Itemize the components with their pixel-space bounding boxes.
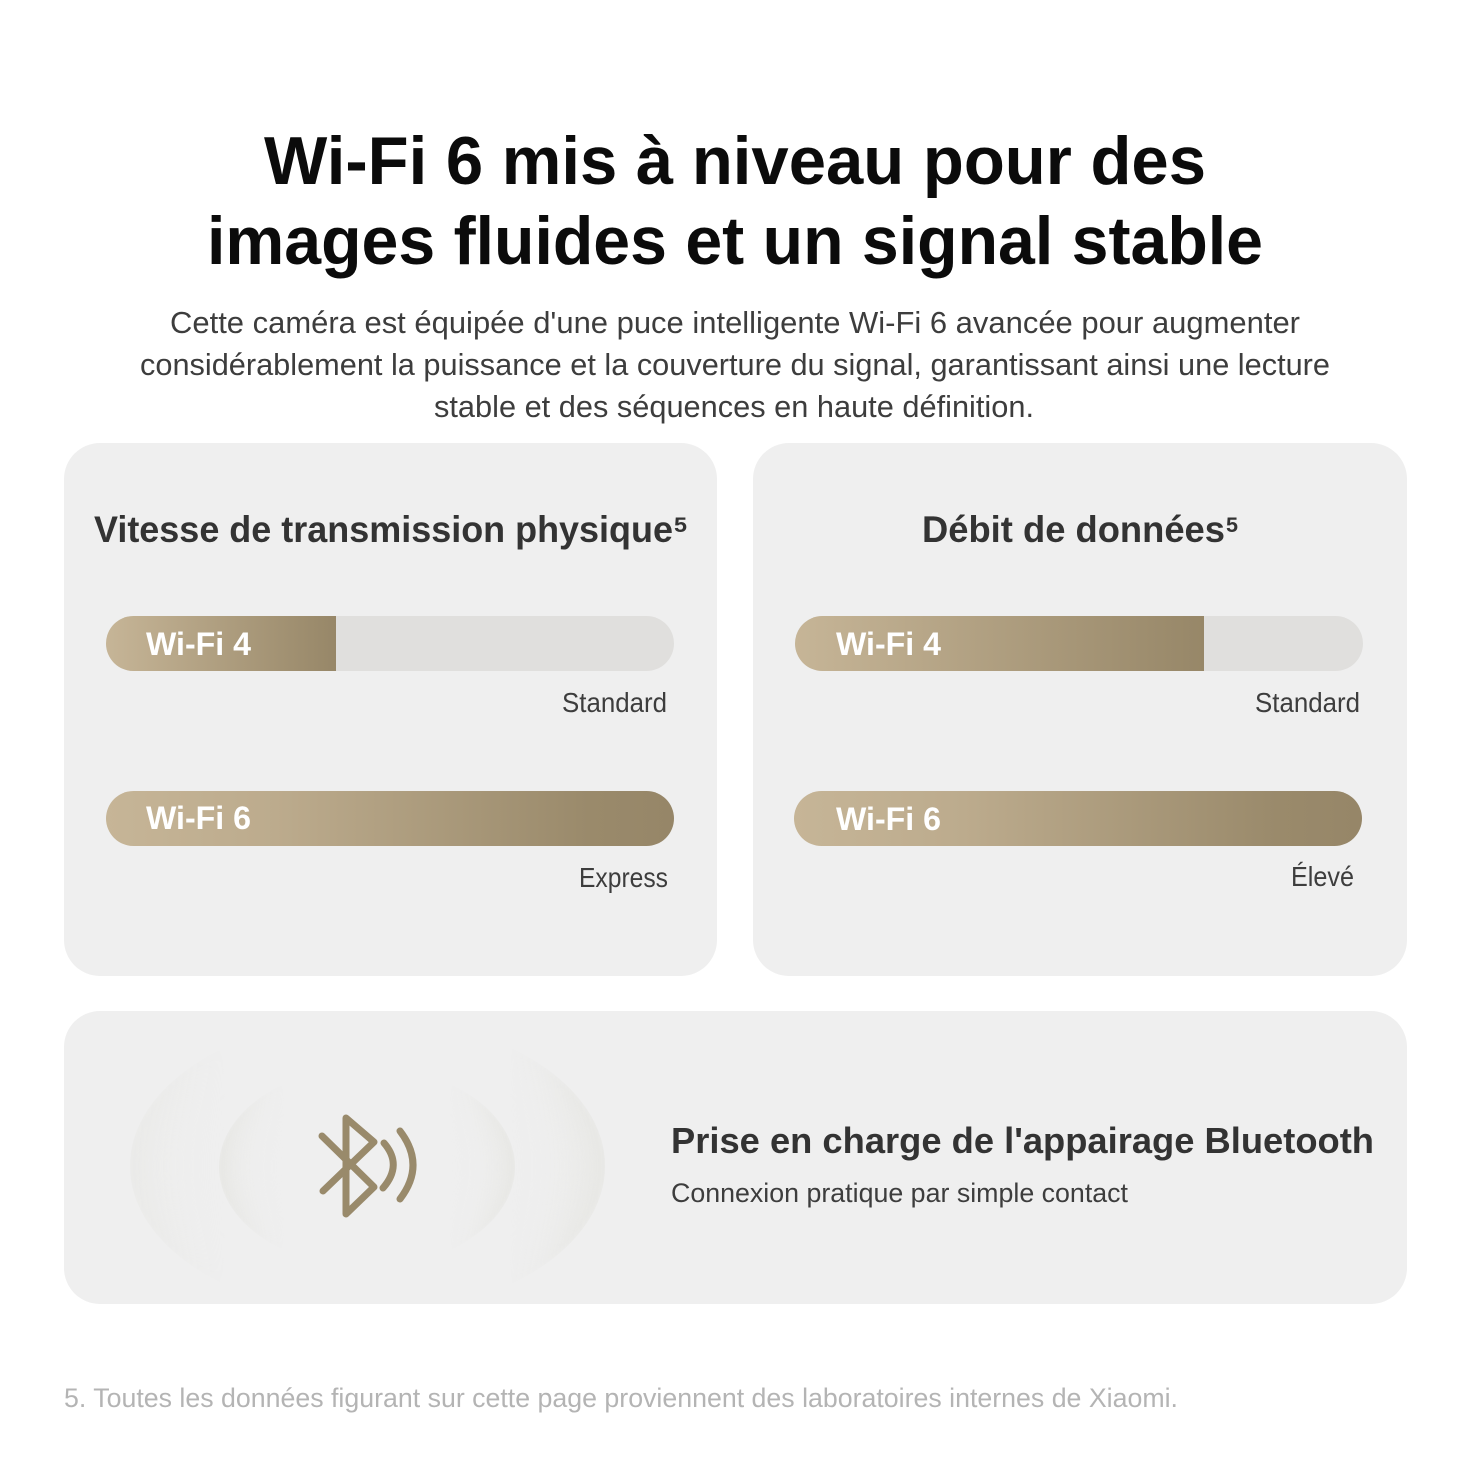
bar: Wi-Fi 4 throughput: Wi-Fi 4 (836, 626, 941, 662)
panel: data throughput (753, 443, 1407, 976)
panel heading: throughput: Débit de données (922, 509, 1225, 550)
panel: Bluetooth pairing (64, 1011, 1407, 1314)
bluetooth subtext: Connexion pratique par simple contact (671, 1178, 1128, 1208)
bar: Wi-Fi 4 physical speed: Wi-Fi 4 (146, 626, 251, 662)
panel heading: throughput: 5 (1226, 514, 1238, 537)
intro text block (140, 305, 1330, 424)
bar: Wi-Fi 6 throughput (794, 791, 1362, 846)
label: Standard: Standard (1255, 687, 1360, 718)
panel heading: physical speed: Vitesse de transmission physique (94, 509, 673, 550)
intro text block: stable et des séquences en haute définition. (434, 389, 1034, 424)
infographic canvas (64, 134, 1407, 1412)
label: Standard: Standard (562, 687, 667, 718)
bar: Wi-Fi 6 throughput: Wi-Fi 6 (836, 801, 941, 837)
bar: Wi-Fi 4 physical speed (106, 616, 674, 671)
label: Élevé: Élevé (1291, 861, 1354, 892)
label: Express: Express (579, 862, 668, 893)
title (207, 123, 1263, 279)
bar: Wi-Fi 4 throughput (795, 616, 1363, 671)
bar: Wi-Fi 6 physical speed: Wi-Fi 6 (146, 800, 251, 836)
icon: Bluetooth with signal waves (322, 1118, 413, 1214)
panel heading: physical speed: 5 (674, 514, 687, 537)
panel: physical transmission speed (64, 443, 717, 976)
bluetooth heading: Prise en charge de l'appairage Bluetooth (671, 1120, 1374, 1161)
title: Wi-Fi 6 mis à niveau pour des (264, 123, 1206, 199)
icon: soft signal rings (220, 1097, 604, 1238)
intro text block: considérablement la puissance et la couverture du signal, garantissant ainsi une lecture (140, 347, 1330, 382)
title: images fluides et un signal stable (207, 203, 1263, 279)
footnote: 5. Toutes les données figurant sur cette page proviennent des laboratoires internes de Xiaomi. (64, 1383, 1178, 1413)
intro text block: Cette caméra est équipée d'une puce intelligente Wi-Fi 6 avancée pour augmenter (170, 305, 1300, 340)
bar: Wi-Fi 6 physical speed (106, 791, 674, 846)
